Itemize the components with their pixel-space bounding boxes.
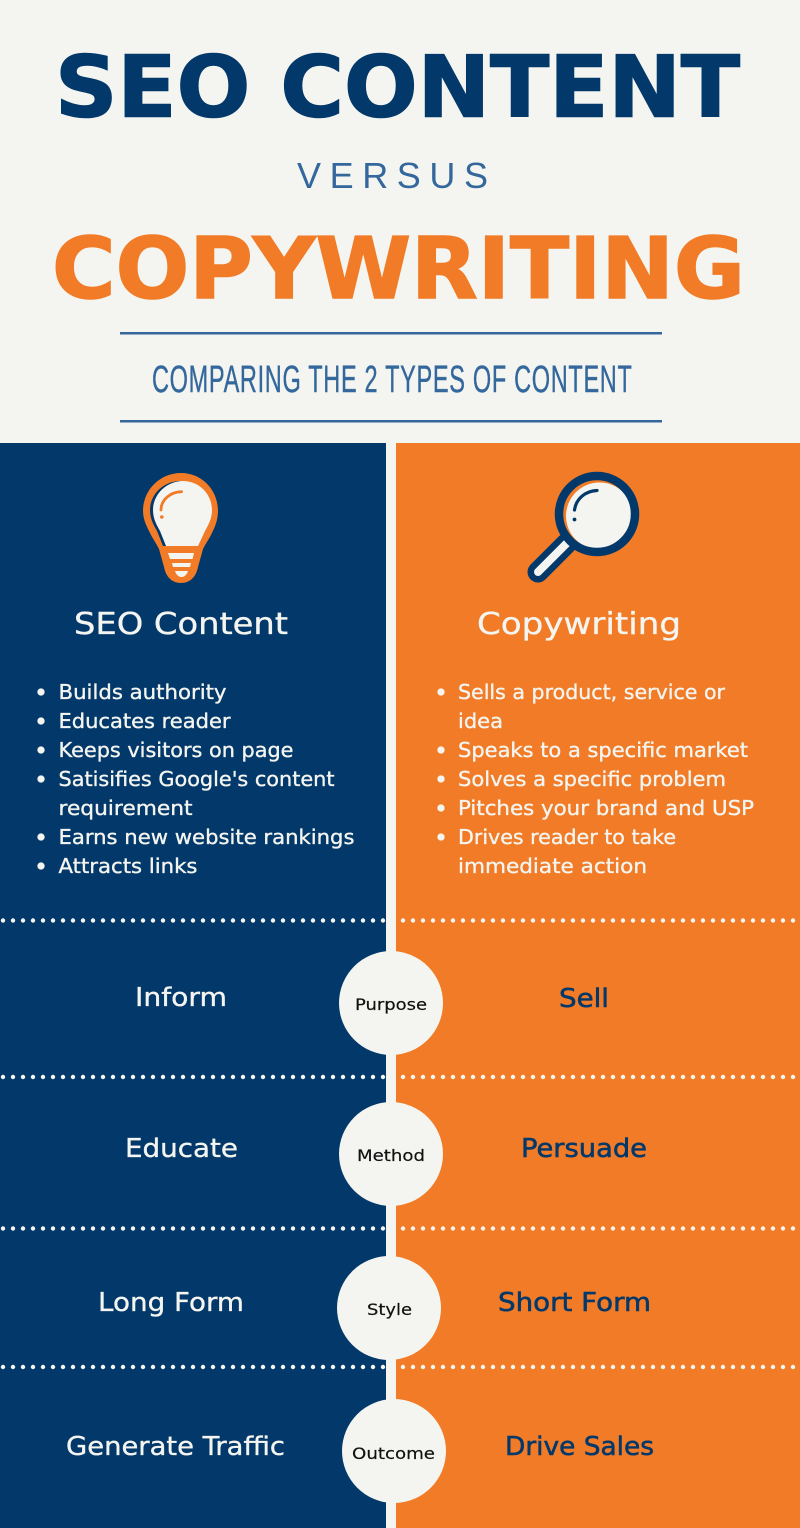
icon: magnifying glass [538,476,635,572]
list: copywriting benefits: Speaks to a specific market [458,738,748,762]
row: outcome: Outcome [352,1444,435,1463]
list: copywriting benefits: immediate action [458,854,647,878]
list: SEO content benefits [38,680,354,878]
row: outcome [66,1399,654,1503]
list: copywriting benefits: Sells a product, service or [458,680,726,704]
list: SEO content benefits: Keeps visitors on page [58,738,294,762]
row: method: Educate [125,1134,238,1164]
heading: comparing the 2 types of content with rules: COMPARING THE 2 TYPES OF CONTENT [152,357,632,400]
panel: SEO content [0,443,386,1528]
row: method [125,1102,647,1206]
row: style: Style [367,1300,412,1319]
subtitle: versus: VERSUS [297,155,488,196]
row: outcome: Generate Traffic [66,1432,285,1462]
panel: copywriting [396,443,800,1528]
row: purpose: Sell [559,984,609,1014]
row: method: Persuade [521,1134,647,1164]
heading: Copywriting column: Copywriting [477,607,681,642]
title: Copywriting: COPYWRITING [52,220,745,318]
list: copywriting benefits: idea [458,709,503,733]
list: SEO content benefits: Educates reader [58,709,231,733]
list: SEO content benefits: Attracts links [58,854,198,878]
title: SEO Content: SEO CONTENT [55,38,740,136]
row: purpose: Purpose [355,995,427,1014]
list: copywriting benefits: Drives reader to take [458,825,676,849]
heading: SEO Content column: SEO Content [74,607,288,642]
row: purpose [135,951,609,1055]
list: copywriting benefits: Pitches your brand and USP [458,796,754,820]
row: purpose: Inform [135,983,227,1013]
list: copywriting benefits [438,680,754,878]
list: SEO content benefits: Satisifies Google's content [58,767,334,791]
list: SEO content benefits: Earns new website rankings [58,825,354,849]
row: method: Method [357,1146,425,1165]
row: outcome: Drive Sales [505,1432,654,1462]
row: style: Short Form [498,1288,651,1318]
dotted row dividers [3,920,797,1367]
list: copywriting benefits: Solves a specific problem [458,767,726,791]
row: style [98,1256,651,1360]
row: style: Long Form [98,1288,244,1318]
list: SEO content benefits: requirement [58,796,192,820]
icon: light bulb [143,473,218,583]
list: SEO content benefits: Builds authority [58,680,226,704]
